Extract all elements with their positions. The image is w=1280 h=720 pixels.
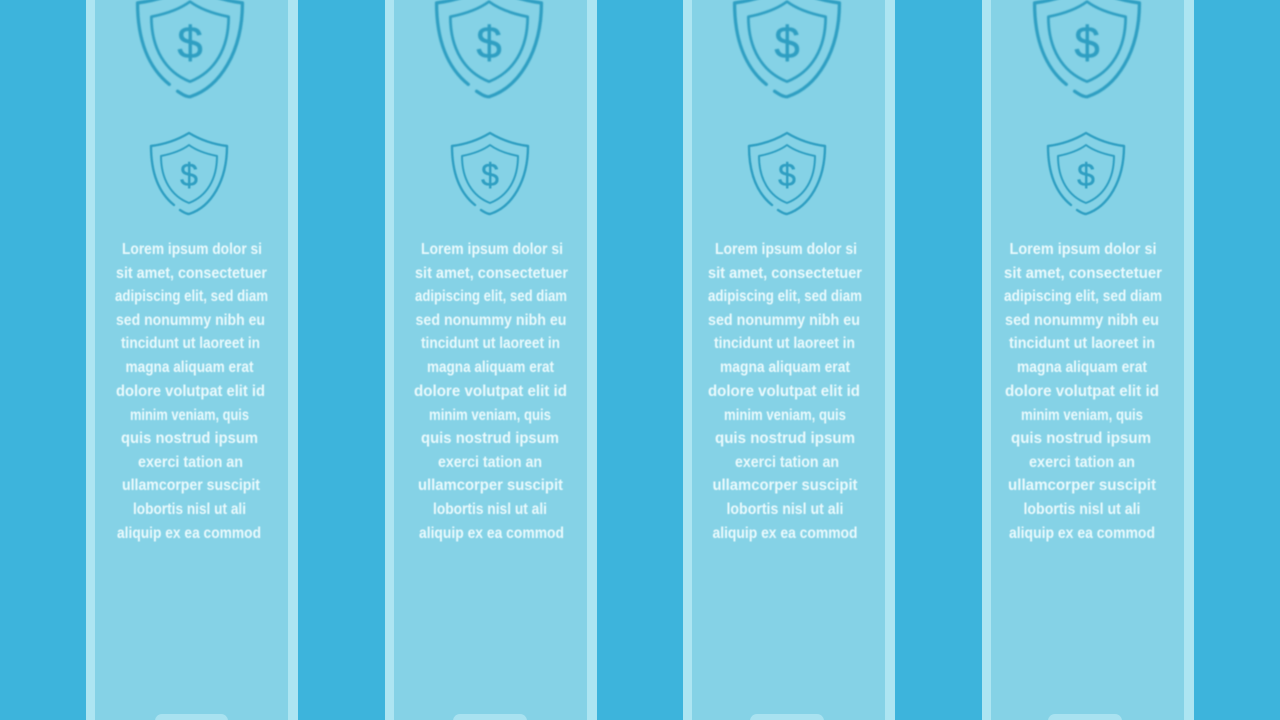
text block: adipiscing elit, sed diam: [415, 288, 567, 305]
text block: sed nonummy nibh eu: [116, 312, 265, 329]
text block: ullamcorper suscipit: [712, 477, 858, 494]
text block: sed nonummy nibh eu: [708, 312, 860, 329]
icon: small shield with dollar: $: [180, 157, 198, 193]
text block: aliquip ex ea commod: [712, 525, 858, 542]
icon: small shield with dollar: [151, 133, 227, 214]
icon: large shield with dollar: [1035, 0, 1139, 97]
text block: sit amet, consectetuer: [1004, 265, 1162, 282]
text block: exerci tation an: [1029, 454, 1135, 471]
text block: tincidunt ut laoreet in: [1009, 335, 1155, 352]
text block: exerci tation an: [438, 454, 542, 471]
text block: [115, 241, 268, 542]
panel frame: [385, 0, 597, 720]
text block: quis nostrud ipsum: [121, 430, 258, 447]
panel: column 2: [385, 0, 597, 720]
text block: [708, 241, 862, 542]
bottom pill: [155, 714, 228, 720]
text block: minim veniam, quis: [130, 407, 249, 424]
panel: column 1: [86, 0, 298, 720]
icon: small shield with dollar: [749, 133, 825, 214]
text block: [1004, 241, 1162, 542]
icon: large shield with dollar: [735, 0, 839, 97]
text block: aliquip ex ea commod: [1009, 525, 1155, 542]
text block: sit amet, consectetuer: [116, 265, 267, 282]
text block: Lorem ipsum dolor si: [421, 241, 563, 258]
icon: large shield with dollar: [138, 0, 242, 97]
text block: adipiscing elit, sed diam: [115, 288, 268, 305]
bottom pill: [1048, 714, 1122, 720]
icon: small shield with dollar: [452, 133, 528, 214]
text block: dolore volutpat elit id: [708, 383, 860, 400]
icon: large shield with dollar: $: [1074, 17, 1100, 68]
panel frame: [683, 0, 895, 720]
text block: aliquip ex ea commod: [117, 525, 261, 542]
text block: lobortis nisl ut ali: [133, 501, 246, 518]
text block: lobortis nisl ut ali: [433, 501, 547, 518]
panel: column 4: [982, 0, 1194, 720]
icon: large shield with dollar: [437, 0, 541, 97]
text block: quis nostrud ipsum: [421, 430, 559, 447]
panel frame: [86, 0, 298, 720]
bottom pill: [453, 714, 527, 720]
text block: Lorem ipsum dolor si: [1010, 241, 1156, 258]
text block: tincidunt ut laoreet in: [714, 335, 855, 352]
text block: [414, 241, 568, 542]
text block: dolore volutpat elit id: [1005, 383, 1159, 400]
text block: quis nostrud ipsum: [1011, 430, 1151, 447]
text block: ullamcorper suscipit: [1008, 477, 1156, 494]
text block: minim veniam, quis: [724, 407, 846, 424]
text block: minim veniam, quis: [1021, 407, 1143, 424]
panel frame: [982, 0, 1194, 720]
text block: dolore volutpat elit id: [414, 383, 567, 400]
icon: small shield with dollar: [1048, 133, 1124, 214]
text block: magna aliquam erat: [427, 359, 554, 376]
text block: quis nostrud ipsum: [715, 430, 855, 447]
text block: exerci tation an: [735, 454, 839, 471]
text block: adipiscing elit, sed diam: [1004, 288, 1162, 305]
text block: lobortis nisl ut ali: [1024, 501, 1140, 518]
icon: large shield with dollar: $: [774, 17, 800, 68]
text block: sit amet, consectetuer: [415, 265, 568, 282]
icon: small shield with dollar: $: [481, 157, 499, 193]
panel: column 3: [683, 0, 895, 720]
icon: large shield with dollar: $: [177, 17, 203, 68]
text block: aliquip ex ea commod: [419, 525, 564, 542]
text block: sit amet, consectetuer: [708, 265, 862, 282]
bottom pill: [750, 714, 824, 720]
text block: minim veniam, quis: [429, 407, 551, 424]
text block: sed nonummy nibh eu: [416, 312, 566, 329]
text block: magna aliquam erat: [720, 359, 850, 376]
text block: tincidunt ut laoreet in: [421, 335, 560, 352]
icon: large shield with dollar: $: [476, 17, 502, 68]
text block: adipiscing elit, sed diam: [708, 288, 862, 305]
text block: ullamcorper suscipit: [418, 477, 563, 494]
text block: exerci tation an: [138, 454, 243, 471]
text block: ullamcorper suscipit: [122, 477, 260, 494]
icon: small shield with dollar: $: [778, 157, 796, 193]
text block: Lorem ipsum dolor si: [715, 241, 857, 258]
text block: dolore volutpat elit id: [116, 383, 265, 400]
text block: lobortis nisl ut ali: [726, 501, 844, 518]
text block: magna aliquam erat: [1017, 359, 1147, 376]
text block: sed nonummy nibh eu: [1005, 312, 1159, 329]
text block: magna aliquam erat: [126, 359, 254, 376]
icon: small shield with dollar: $: [1077, 157, 1095, 193]
text block: tincidunt ut laoreet in: [121, 335, 260, 352]
text block: Lorem ipsum dolor si: [122, 241, 262, 258]
